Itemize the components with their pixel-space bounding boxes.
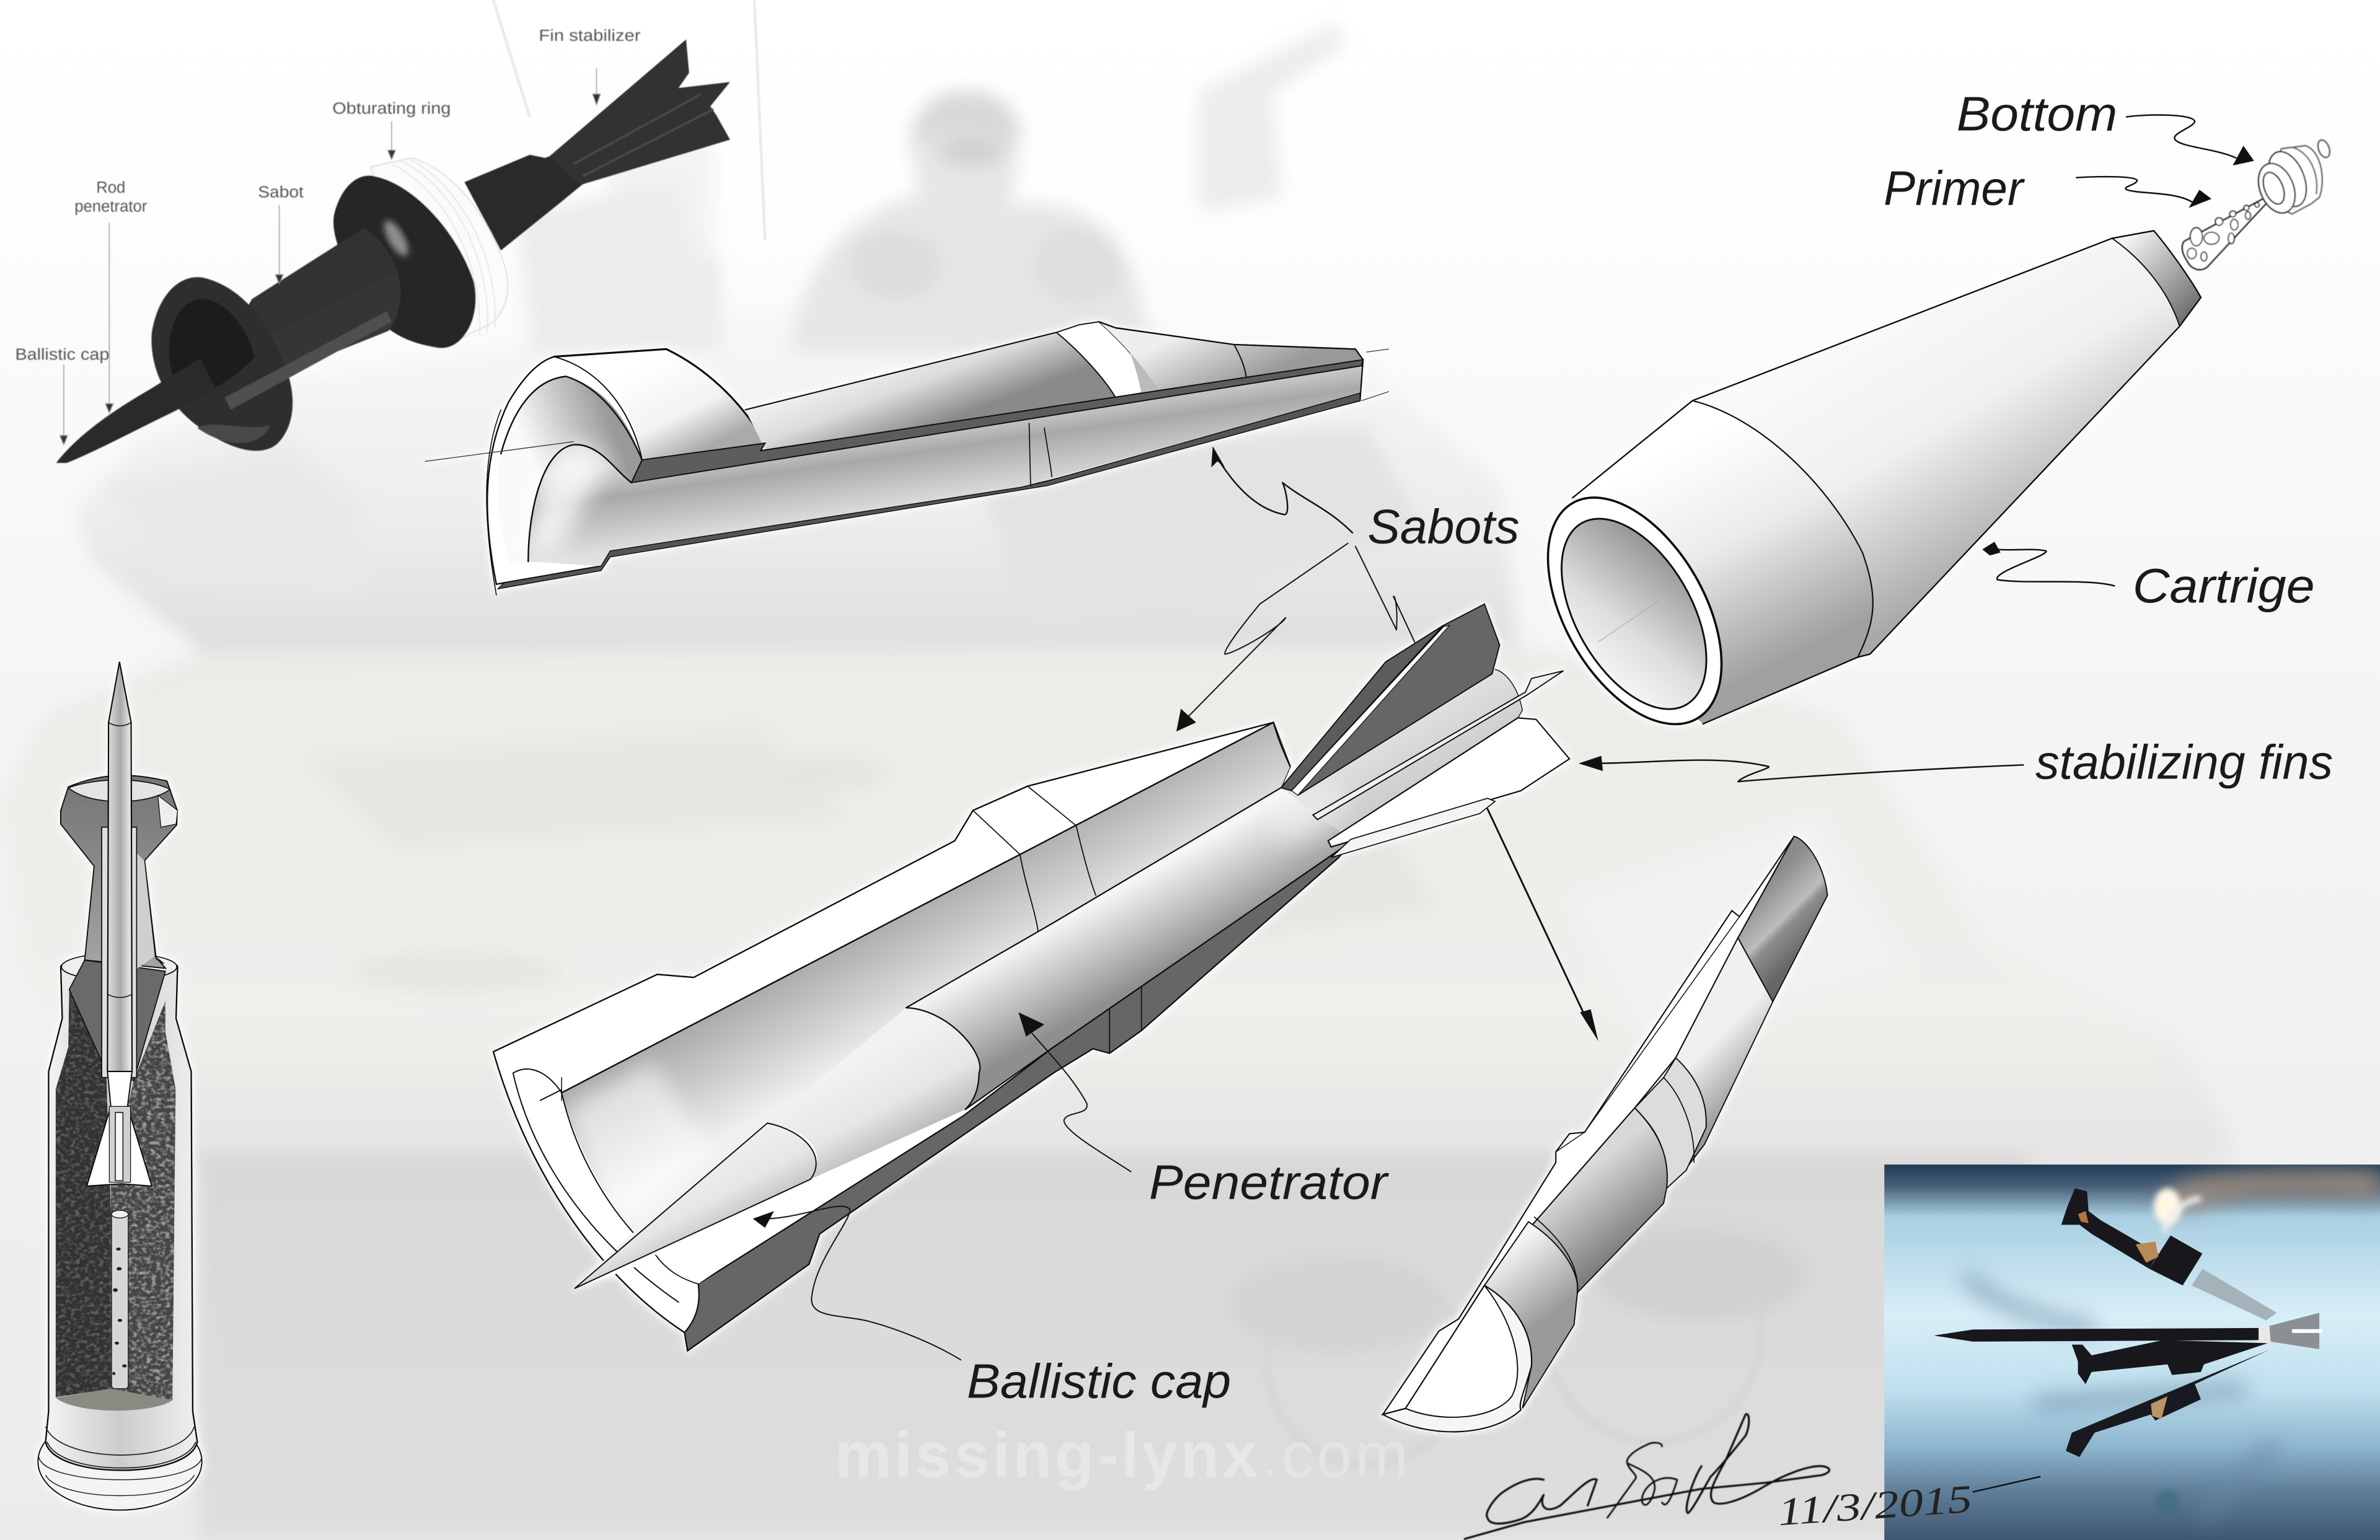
muzzle plume [2163, 1171, 2380, 1214]
leader arrows [60, 68, 601, 445]
bore [1532, 495, 1736, 733]
penetrator front cone [767, 1008, 980, 1179]
cartridge body taper [1693, 238, 2180, 657]
label: rod penetrator: Rod [96, 179, 125, 196]
propellant floor [56, 1389, 172, 1410]
callout: penetrator [1018, 1012, 1389, 1210]
illustration: right sabot [1383, 836, 1828, 1432]
round callouts [15, 27, 641, 445]
sabot flare [61, 775, 177, 968]
penetrator rod [107, 662, 132, 1071]
illustration: cartridge [1512, 231, 2201, 754]
callout: primer: Primer [1884, 161, 2025, 216]
dark lower strip [684, 841, 1352, 1351]
cylinder band [554, 349, 765, 460]
illustration: upper sabot [425, 322, 1389, 595]
callout: stabilizing fins: stabilizing fins [2035, 734, 2333, 789]
lower dark edge [498, 393, 1360, 589]
upper dark edge [632, 359, 1363, 483]
photo: sabot separation [1884, 1164, 2380, 1540]
sabot body [227, 227, 400, 379]
rod penetrator [56, 358, 216, 463]
arrow to right sabot [1488, 809, 1598, 1041]
illustration: dark APFSDS round [56, 40, 730, 463]
tail cylinder [1281, 669, 1522, 847]
rod tail and fins [87, 1071, 152, 1186]
callout: primer [1884, 161, 2211, 216]
lower fin [1328, 718, 1569, 847]
callout: bottom [1957, 87, 2254, 165]
sabot funnel [69, 960, 165, 1081]
upper hollow [498, 376, 642, 565]
penetrator tip [575, 1123, 816, 1288]
obturating ring [371, 158, 508, 348]
callout: penetrator: Penetrator [1149, 1155, 1389, 1210]
top face seams [973, 786, 1076, 855]
date: 11/3/2015 [1776, 1477, 1973, 1534]
fin stabilizer [550, 40, 730, 185]
callout: cartrige: Cartrige [2133, 558, 2315, 613]
base ring [2112, 231, 2201, 327]
base flange [38, 1413, 202, 1510]
callout: cartrige [1982, 542, 2315, 613]
bottom crescent face [1383, 1285, 1532, 1432]
arrow to upper sabot [1211, 446, 1352, 533]
flash tube [112, 1213, 128, 1389]
front flange ring [151, 277, 293, 451]
small ring [2316, 138, 2332, 159]
case wall [45, 959, 197, 1470]
tail cone [1099, 322, 1363, 390]
callout: sabots: Sabots [1368, 499, 1519, 554]
sabot silhouette [493, 723, 1352, 1351]
central rod [1934, 1328, 2259, 1342]
callout: stabilizing fins [1488, 734, 2333, 1041]
label: obturating ring: Obturating ring [332, 100, 451, 118]
rear dark section [1738, 836, 1828, 1001]
centre axis [425, 349, 1389, 461]
lower petal [2066, 1349, 2271, 1457]
rear disc [333, 176, 476, 348]
ring section [1056, 322, 1158, 398]
inner rim line [513, 1069, 679, 1302]
upper petal [2061, 1189, 2158, 1269]
arrow to lower sabot [1176, 543, 1348, 731]
propellant cavity dark right [111, 1001, 175, 1400]
label: fin stabilizer: Fin stabilizer [539, 27, 641, 45]
penetrator body [906, 788, 1352, 1109]
watermark: missing-lynx.com [835, 1419, 1411, 1490]
illustration: lower sabot with penetrator [493, 604, 1569, 1351]
mid section [1664, 938, 1773, 1189]
tapered body [745, 332, 1116, 449]
label: rod penetrator: penetrator [74, 198, 148, 216]
callout: ballistic cap [753, 1207, 1231, 1409]
photo shadows [1965, 1275, 2276, 1518]
signature [1465, 1414, 1829, 1539]
lower hollow surface [528, 366, 1362, 566]
groove lines [1029, 423, 1052, 486]
callout: sabots [1176, 446, 1519, 731]
silhouette and rim [487, 349, 1363, 584]
dark fin [1298, 604, 1500, 795]
hollow [562, 723, 1290, 1288]
case mouth [61, 953, 177, 980]
mouth rim [1512, 468, 1758, 754]
white ledge [575, 1133, 917, 1288]
central sabot bore [102, 827, 136, 1078]
pale cone [2192, 1269, 2276, 1321]
date [1776, 1477, 2040, 1534]
arrow to tail fin [1355, 547, 1414, 642]
illustration: cutaway cartridge [38, 662, 202, 1510]
label: sabot: Sabot [258, 183, 304, 201]
callout: bottom: Bottom [1957, 87, 2117, 141]
fins and flash [2262, 1313, 2319, 1349]
middle petal [2072, 1340, 2268, 1384]
flat upper face [1383, 836, 1794, 1414]
rear body [464, 155, 589, 250]
long barrel [1528, 1108, 1667, 1295]
ring section [1635, 1058, 1706, 1189]
illustration: bottom cap [2252, 138, 2332, 218]
propellant cavity dark left [56, 990, 111, 1397]
label: ballistic cap: Ballistic cap [15, 346, 109, 363]
cartridge body front [1572, 401, 1873, 724]
thin fin [1313, 671, 1563, 819]
illustration: primer tube [2182, 199, 2268, 270]
front band [1484, 1221, 1578, 1409]
callout: ballistic cap: Ballistic cap [967, 1354, 1231, 1409]
